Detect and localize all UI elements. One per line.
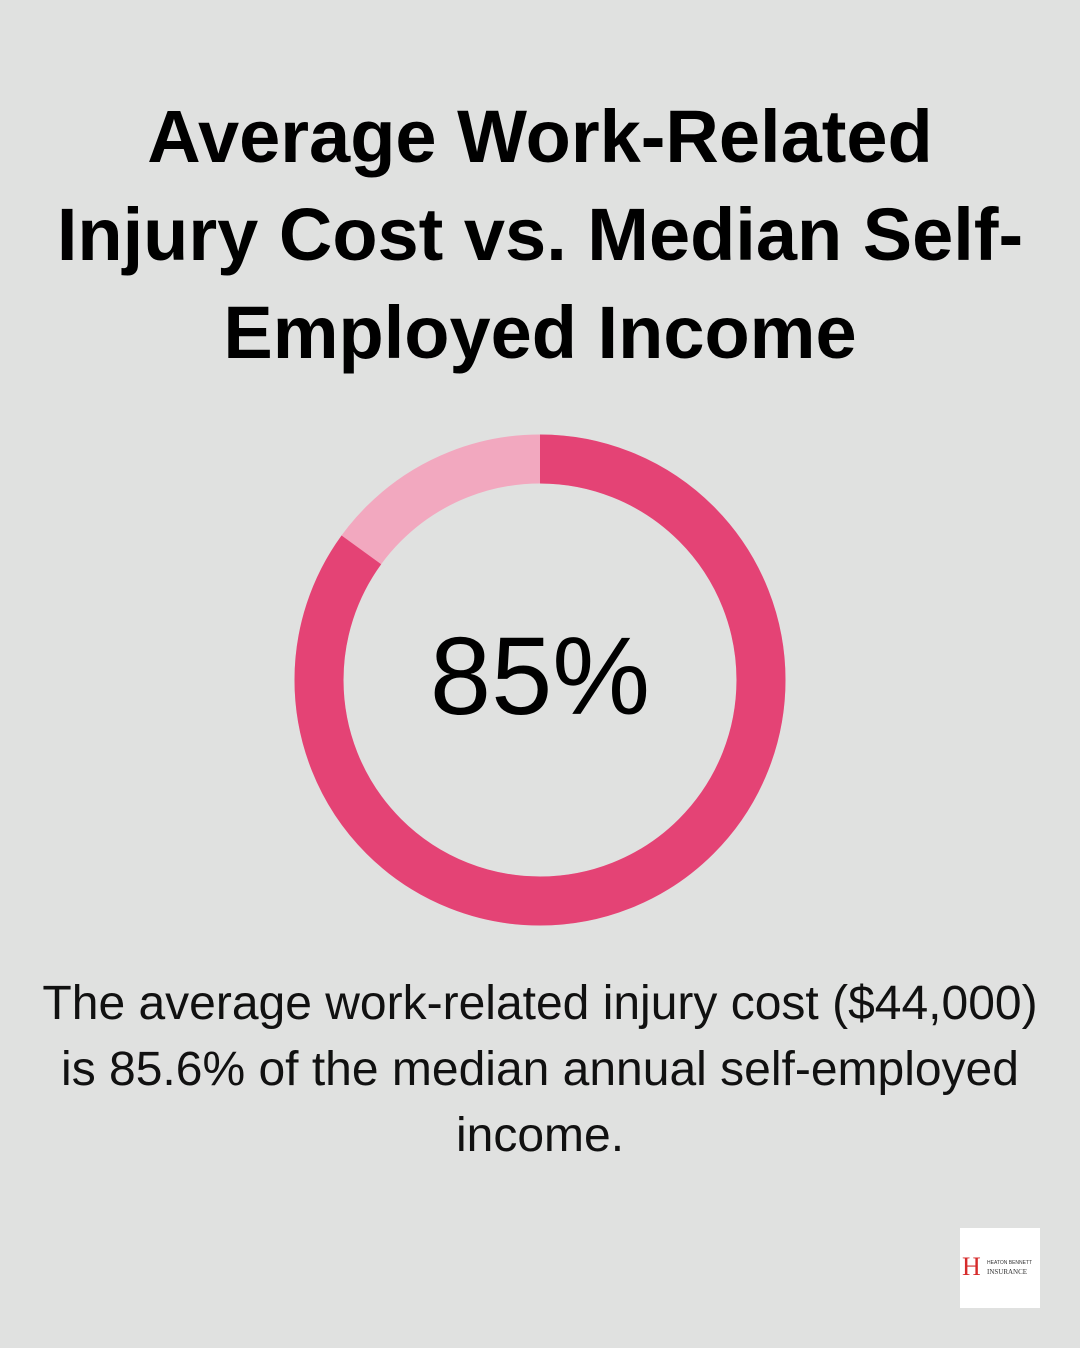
logo: HEATON BENNETT (987, 1260, 1032, 1266)
logo (960, 1228, 1040, 1308)
logo: H (962, 1252, 981, 1281)
dark segment 85% (319, 459, 761, 901)
description text: income. (456, 1109, 624, 1162)
description text: The average work-related injury cost ($44,000) (42, 977, 1038, 1030)
light segment (319, 459, 761, 901)
title (57, 95, 1023, 374)
description text (42, 977, 1038, 1162)
title: Injury Cost vs. Median Self- (57, 193, 1023, 276)
center value: 85% (430, 615, 650, 738)
title: Employed Income (223, 291, 857, 374)
title: Average Work-Related (147, 95, 933, 178)
logo: INSURANCE (987, 1268, 1027, 1276)
description text: is 85.6% of the median annual self-employed (61, 1043, 1019, 1096)
